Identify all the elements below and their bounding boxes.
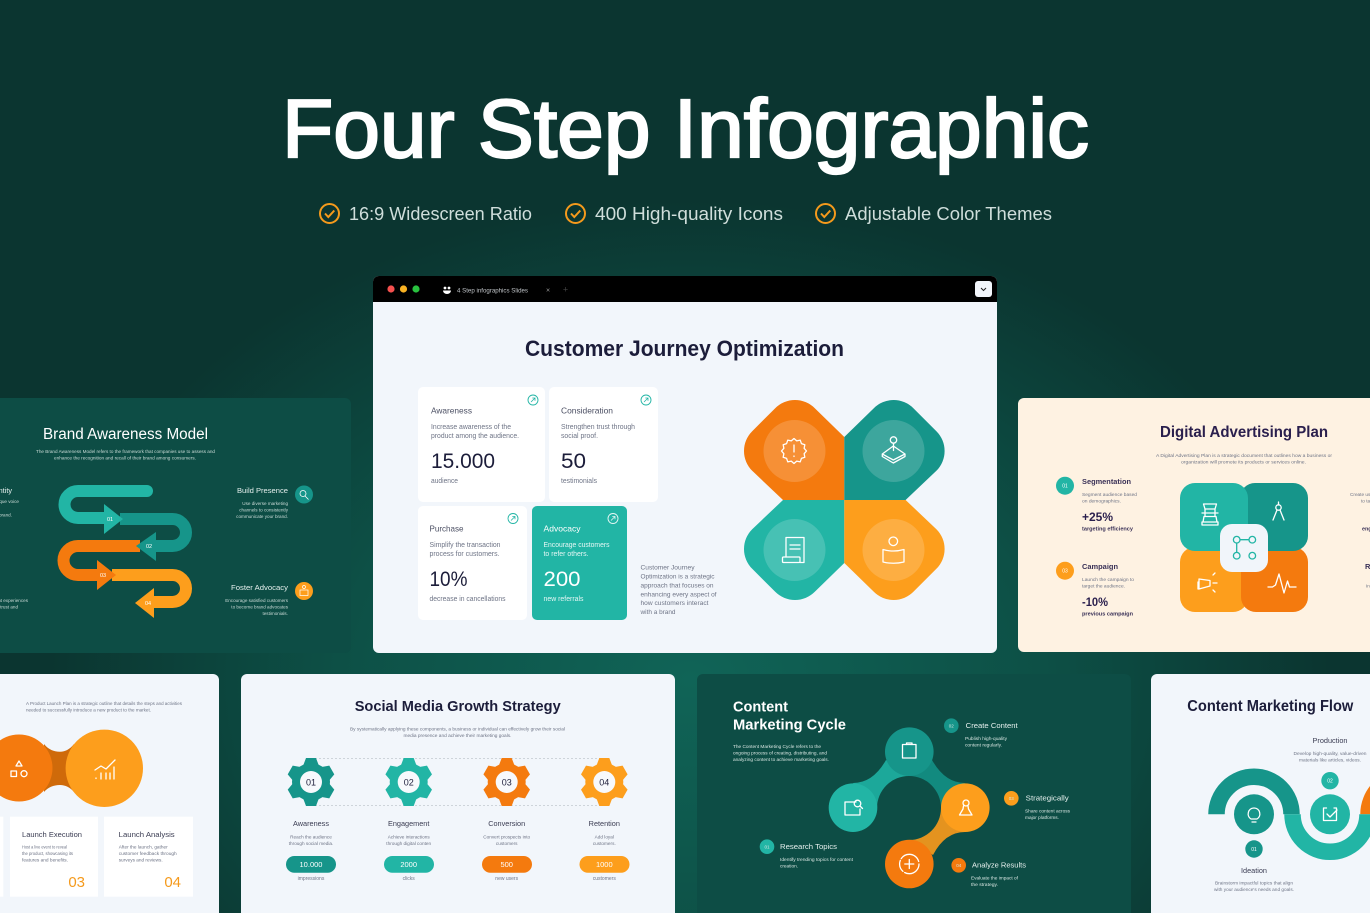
step: production: 02: [1327, 779, 1333, 785]
step: awareness: through social media.: [289, 841, 333, 846]
description: brand awareness: [36, 449, 215, 460]
step: ideation: 01: [1251, 847, 1257, 853]
card: launch execution: Host a live event to reveal: [22, 844, 67, 850]
card: purchase: process for customers.: [430, 551, 500, 558]
step: retention: Add loyal: [595, 834, 614, 840]
card: launch execution: 03: [68, 874, 85, 891]
description: social media: media presence and achieve their marketing goals.: [404, 733, 512, 738]
card: advocacy: new referrals: [544, 596, 584, 603]
arrow 02: [120, 519, 186, 561]
node: analyze: [885, 840, 934, 888]
label: build presence: [236, 486, 289, 519]
chart: cycle: [829, 727, 990, 888]
card: launch analysis: Launch Analysis: [119, 830, 175, 839]
card: awareness: Awareness: [431, 406, 472, 416]
text block: journey description: how customers interact: [640, 600, 709, 607]
browser toolbar: ×: [546, 288, 550, 294]
arc: teal: [1292, 814, 1368, 852]
icon: advocate: [295, 582, 313, 600]
petal: alert: [744, 400, 844, 500]
step: retention: 1000: [596, 860, 613, 869]
description: product launch: [26, 701, 183, 712]
description: content marketing: [733, 744, 829, 763]
heading: brand awareness: Brand Awareness Model: [43, 426, 208, 443]
feature: widescreen ratio: 16:9 Widescreen Ratio: [349, 203, 532, 224]
panel: content marketing flow: [1151, 674, 1370, 913]
card: consideration: [549, 387, 658, 502]
step: ideation: [1214, 794, 1294, 892]
chart: joined circles: [0, 730, 143, 807]
step: retention: Retention: [589, 819, 620, 828]
card: consideration: Consideration: [561, 406, 613, 416]
label: analyze results: the strategy.: [971, 882, 998, 887]
label: foster advocacy: testimonials.: [262, 611, 288, 616]
heading: customer journey: Customer Journey Optimization: [525, 336, 844, 361]
node: research: [829, 783, 877, 832]
step: production: materials like articles, videos.: [1299, 758, 1361, 762]
step: segmentation: +25%: [1082, 510, 1113, 524]
card: launch execution: the product, showcasing its: [22, 851, 74, 857]
description: product launch: A Product Launch Plan is a strategic outline that details the steps and activities: [26, 701, 183, 706]
arc: dark teal: [1216, 777, 1292, 814]
step: conversion: customers: [496, 841, 518, 846]
browser toolbar: 4 Step infographics Slides: [457, 288, 528, 294]
heading: digital advertising: Digital Advertising Plan: [1160, 424, 1328, 441]
icon: growth chart: [95, 760, 115, 779]
label: research topics: 01: [764, 844, 770, 850]
arc: orange: [1368, 777, 1370, 814]
description: content marketing: ongoing process of creating, distributing, and: [733, 750, 827, 756]
card: launch analysis: customer feedback through: [119, 851, 177, 857]
label: analyze results: Evaluate the impact of: [971, 875, 1019, 880]
description: digital advertising: A Digital Advertising Plan is a strategic document that outlines how a business or: [1156, 453, 1332, 458]
label: research topics: creation.: [780, 864, 798, 868]
step: conversion: new users: [495, 876, 519, 882]
step: awareness: 10.000: [300, 860, 322, 869]
heading: content marketing: Marketing Cycle: [733, 717, 846, 733]
step: ideation: with your audience's needs and goals.: [1214, 887, 1294, 892]
step: conversion: 500: [500, 860, 513, 869]
arrow 02: 02: [146, 544, 152, 550]
card: consideration: Strengthen trust through: [561, 424, 635, 431]
step: segmentation: 01: [1062, 484, 1068, 490]
label: analyze results: Analyze Results: [972, 861, 1026, 870]
label: analyze results: 04: [956, 863, 962, 868]
step: awareness: 01: [306, 778, 316, 788]
label: foster advocacy: [225, 583, 289, 616]
browser toolbar: +: [563, 284, 568, 294]
tile: amber megaphone: [1180, 547, 1248, 612]
description: social media: By systematically applying these components, a business or individual can effectively grow their social: [350, 726, 565, 732]
tile: teal chess: [1180, 483, 1248, 551]
step: engagement: through digital conten: [386, 841, 432, 846]
step: engagement: [384, 758, 434, 882]
tile: center nodes: [1220, 524, 1268, 572]
description: digital advertising: [1156, 453, 1332, 464]
step: production: [1294, 736, 1367, 834]
step: conversion: 03: [502, 778, 512, 788]
label: create content: content regularly.: [965, 743, 1002, 748]
card: awareness: [418, 387, 545, 502]
card: purchase: [418, 506, 527, 620]
card: consideration: 50: [561, 450, 586, 473]
step: awareness: impressions: [298, 876, 325, 882]
step: ideation: Ideation: [1241, 866, 1267, 875]
arrow 04: 04: [145, 601, 151, 607]
step: ideation: Brainstorm impactful topics that align: [1215, 880, 1293, 886]
description: social media: [350, 726, 565, 738]
label: research topics: Identify trending topics for content: [780, 857, 854, 862]
clipped text: right side: [1350, 492, 1370, 588]
arrow 03: [63, 546, 140, 590]
text block: journey description: enhancing every aspect of: [640, 592, 717, 598]
label: strategically: Strategically: [1026, 794, 1069, 803]
step: retention: [580, 758, 630, 882]
arrow 01: [64, 491, 147, 534]
panel: brand awareness model: [0, 398, 351, 653]
label: research topics: [760, 839, 854, 868]
panel: customer journey window: [373, 276, 997, 653]
feature: icons: 400 High-quality Icons: [595, 203, 783, 224]
petal: document: [744, 500, 844, 600]
label: strategically: major platforms.: [1025, 815, 1059, 820]
step: segmentation: [1056, 477, 1137, 532]
label: create content: Publish high-quality: [965, 736, 1008, 741]
label: foster advocacy: to become brand advocates: [231, 604, 289, 610]
petal: joystick: [844, 400, 945, 500]
dashed connector: [311, 758, 604, 806]
step: segmentation: on demographics.: [1082, 498, 1121, 504]
heading: content marketing: Content: [733, 700, 788, 716]
card: purchase: Simplify the transaction: [430, 542, 501, 549]
step: production: Production: [1313, 736, 1347, 745]
label: research topics: Research Topics: [780, 842, 837, 851]
clipped text: right side: to ta: [1361, 498, 1370, 504]
chart: four petal clover: [744, 400, 945, 600]
step: campaign: 03: [1062, 569, 1068, 575]
step: conversion: Convert prospects into: [483, 834, 531, 840]
arrow 04: [112, 575, 186, 618]
heading: social media: Social Media Growth Strategy: [355, 699, 562, 715]
description: product launch: needed to successfully introduce a new product to the market.: [26, 708, 151, 712]
label: create content: [944, 718, 1018, 748]
panel: social media growth: [241, 674, 675, 913]
step: engagement: Achieve interactions: [388, 834, 430, 840]
label: foster advocacy: Foster Advocacy: [231, 583, 288, 592]
text block: journey description: [640, 564, 717, 616]
panel: digital advertising plan: [1018, 398, 1370, 652]
arrow 01: 01: [107, 517, 113, 523]
card: launch analysis: [104, 817, 193, 897]
label: analyze results: [951, 858, 1026, 887]
step: segmentation: targeting efficiency: [1082, 526, 1133, 532]
arrow 03: 03: [100, 573, 106, 579]
petal: person: [844, 500, 945, 600]
step: awareness: Reach the audience: [290, 834, 332, 840]
panel: content marketing cycle: [697, 674, 1131, 913]
card: purchase: 10%: [430, 568, 468, 591]
browser toolbar: [373, 276, 997, 302]
step: campaign: previous campaign: [1082, 612, 1133, 618]
step: campaign: [1056, 562, 1134, 618]
label: strategically: Share content across: [1025, 809, 1071, 814]
step: conversion: Conversion: [488, 819, 525, 828]
label: strategically: 03: [1009, 796, 1014, 801]
card: awareness: 15.000: [431, 450, 495, 473]
card: purchase: decrease in cancellations: [430, 596, 506, 603]
card: launch analysis: 04: [164, 874, 181, 891]
label: build presence: Build Presence: [237, 486, 288, 495]
label: build presence: channels to consistently: [239, 508, 289, 512]
step: campaign: Campaign: [1082, 562, 1118, 571]
node: share: [941, 783, 990, 832]
description: content marketing: analyzing content to achieve marketing goals.: [733, 757, 829, 763]
label: build presence: communicate your brand.: [236, 514, 288, 519]
step: engagement: Engagement: [388, 819, 429, 828]
step: campaign: -10%: [1082, 595, 1108, 609]
description: brand awareness: The Brand Awareness Model refers to the framework that companies use to assess and: [36, 449, 215, 454]
step: segmentation: Segment audience based: [1082, 492, 1137, 497]
step: retention: customers.: [593, 841, 616, 846]
label: strategically: [1004, 791, 1071, 820]
feature: color themes: Adjustable Color Themes: [845, 203, 1052, 224]
step: engagement: clicks: [403, 876, 415, 882]
tile: orange pulse: [1241, 547, 1308, 612]
panel: product launch plan: [0, 674, 219, 913]
card: advocacy: 200: [544, 568, 580, 591]
text block: journey description: Optimization is a strategic: [640, 574, 715, 580]
card: launch execution: [10, 817, 98, 897]
text block: journey description: Customer Journey: [640, 564, 695, 572]
card: purchase: Purchase: [430, 524, 464, 534]
card: consideration: testimonials: [561, 478, 598, 485]
card: awareness: Increase awareness of the: [431, 424, 511, 431]
clipped text: right side: In: [1366, 584, 1370, 588]
card: awareness: product among the audience.: [431, 433, 519, 440]
clipped label: left side: [0, 486, 29, 610]
node: create: [885, 727, 934, 776]
card: launch analysis: After the launch, gather: [119, 844, 168, 850]
feature list: [320, 203, 1052, 224]
card: launch execution: features and benefits.: [22, 858, 68, 864]
text block: journey description: approach that focuses on: [640, 582, 714, 590]
step: retention: 04: [599, 778, 609, 788]
step: retention: customers: [593, 876, 616, 882]
tile: dark teal compass: [1240, 483, 1308, 551]
connector: dark band: [909, 760, 965, 808]
heading: content flow: Content Marketing Flow: [1187, 698, 1354, 715]
step: campaign: Launch the campaign to: [1082, 577, 1134, 582]
card: launch execution: Launch Execution: [22, 830, 82, 839]
icon: shapes: [11, 761, 27, 777]
description: digital advertising: organization will promote its products or services online.: [1181, 460, 1306, 464]
connector: teal band: [853, 760, 909, 808]
step: conversion: [482, 758, 532, 882]
icon: search: [295, 486, 313, 504]
card: advocacy: Encourage customers: [544, 542, 610, 549]
step: segmentation: Segmentation: [1082, 477, 1131, 486]
description: brand awareness: enhance the recognition and recall of their brand among consumers.: [54, 456, 196, 460]
step: production: Develop high-quality, value-driven: [1294, 751, 1367, 756]
card: consideration: social proof.: [561, 433, 598, 440]
connector: amber band: [909, 808, 965, 855]
card: previous step: [0, 817, 3, 897]
step: engagement: 02: [404, 778, 414, 788]
label: create content: Create Content: [966, 721, 1018, 730]
card: launch analysis: surveys and reviews.: [119, 858, 163, 864]
title: Four Step Infographic: [282, 82, 1089, 175]
description: content marketing: The Content Marketing Cycle refers to the: [733, 744, 821, 750]
label: build presence: Use diverse marketing: [242, 501, 288, 506]
text block: journey description: with a brand: [640, 609, 676, 616]
card: advocacy: Advocacy: [544, 524, 581, 534]
clipped text: right side: Create us: [1350, 492, 1370, 497]
card: advocacy: to refer others.: [544, 551, 589, 558]
heading: content marketing: [733, 700, 846, 733]
step: awareness: Awareness: [293, 819, 329, 828]
step: campaign: target the audience.: [1082, 584, 1125, 588]
card: advocacy: [532, 506, 627, 620]
step: engagement: 2000: [400, 860, 417, 869]
wave chart: [1216, 777, 1370, 852]
card: awareness: audience: [431, 478, 458, 485]
label: create content: 02: [949, 724, 954, 728]
label: foster advocacy: Encourage satisfied customers: [225, 598, 289, 603]
step: awareness: [286, 758, 336, 882]
chart: four tile grid: [1180, 483, 1308, 612]
